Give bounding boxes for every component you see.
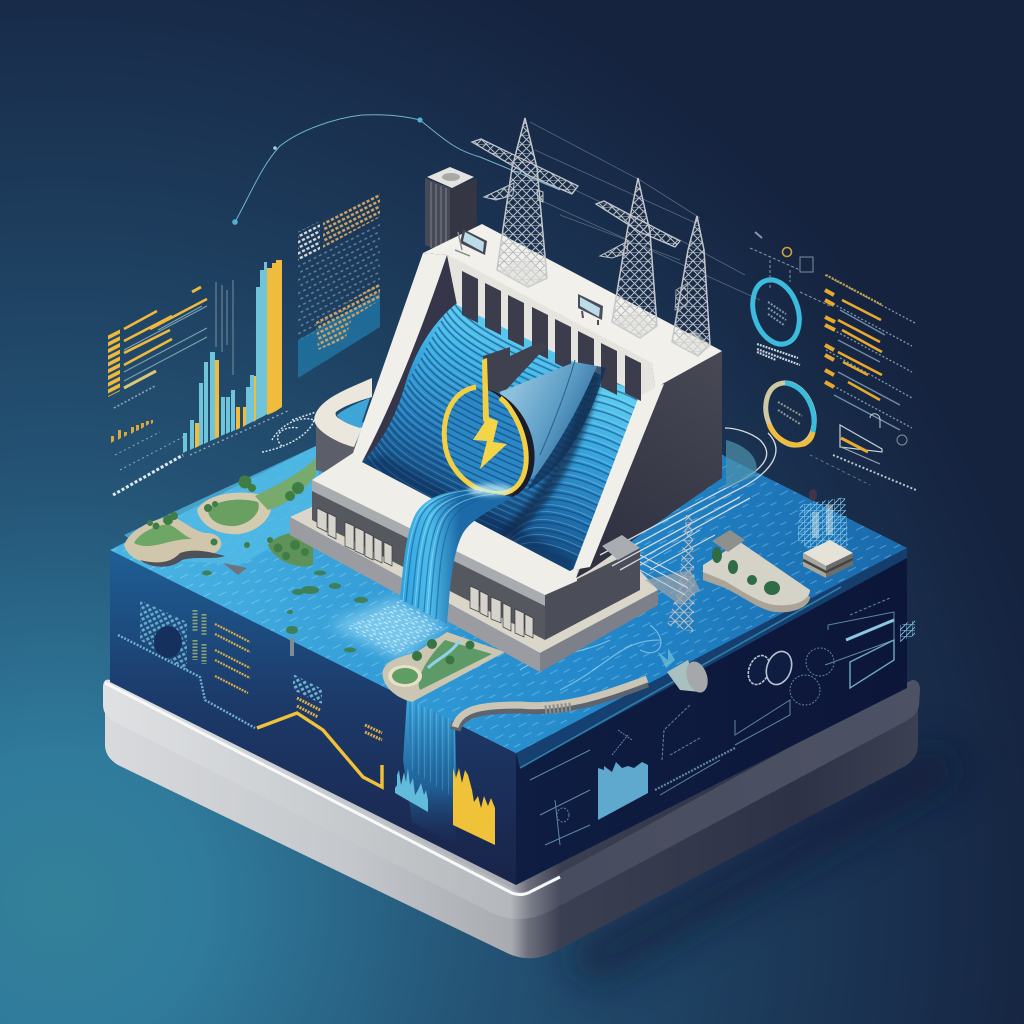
drop shadow under platform: [560, 745, 975, 990]
yellow dotted text: [297, 698, 382, 740]
yellow stripe column: [108, 329, 120, 397]
spillway water: [362, 303, 638, 571]
small islets in water: [202, 570, 368, 652]
waterfall stream: [400, 484, 513, 624]
yellow bars: [453, 768, 495, 845]
peninsula with trees: [703, 530, 810, 612]
energy ring: [442, 384, 535, 497]
mini chart box: [810, 414, 916, 490]
substation: [797, 489, 853, 578]
platform: lower tray: [105, 705, 918, 958]
lightning bolt: [473, 417, 507, 469]
deck monitor right: [578, 294, 603, 325]
lightning bolt stem: [482, 358, 489, 425]
ring label marks: [768, 302, 786, 325]
tray highlight rim: [105, 683, 560, 895]
hatch side tag: [900, 620, 915, 642]
trees: [147, 476, 309, 560]
multi-colour ring gauge: [757, 376, 823, 452]
centre lawn: [208, 500, 259, 526]
pylon in water: [640, 515, 700, 632]
yellow ring stroke: [444, 387, 526, 494]
block: top water surface: [110, 348, 907, 753]
dam: left white buttress: [353, 253, 447, 462]
dam: front wall with windows: [312, 480, 640, 640]
trees and shrubs: [712, 547, 780, 595]
sketch circuit lines: [530, 598, 894, 845]
chart: dotted teal heat block: [140, 600, 187, 670]
boat: [223, 563, 247, 575]
island: upper bank: [255, 458, 316, 510]
top icons and dotted links: [750, 232, 830, 306]
dam: right white buttress: [573, 384, 664, 570]
dam: right concrete wall: [576, 351, 722, 578]
turbine cylinder: [500, 360, 606, 492]
small building: [712, 530, 745, 552]
islands: left shoreline: [124, 445, 368, 656]
right lobe water: [506, 383, 638, 571]
block: right face: [516, 548, 915, 885]
road and pipe along front edge: [455, 679, 647, 730]
platform: upper tray: [103, 680, 920, 919]
data panel: right floating gauges: [745, 232, 916, 490]
yellow line chart: [257, 713, 382, 787]
block: left face: [110, 550, 516, 885]
yellow text lines: [215, 624, 250, 693]
ring inner water: [446, 387, 524, 491]
island: near plinth: [268, 532, 313, 566]
dam: dark inner left wall: [358, 255, 460, 462]
island: centre: [197, 493, 271, 534]
window group left: [317, 508, 392, 566]
window group right: [470, 586, 533, 638]
shadow beside cylinder: [505, 366, 597, 536]
small yellow bars: [111, 420, 153, 443]
gate openings: [462, 271, 641, 401]
horizontal bar lines: [113, 280, 290, 495]
dam: lower ledge: [290, 420, 658, 672]
outer left lawn: [134, 524, 192, 546]
base shadow: [362, 455, 575, 571]
foam below waterfall: [330, 598, 448, 660]
bar chart: yellow bars: [195, 260, 282, 448]
mini blue grid: [293, 674, 322, 704]
dotted heat panel: [298, 192, 380, 378]
top glow strip: [516, 548, 907, 768]
pylon 2: [596, 178, 680, 338]
data panel: left floating charts: [108, 115, 560, 495]
island: foreground below waterfall: [383, 632, 505, 702]
caption marks: [757, 344, 800, 365]
cyan ring gauge: [745, 274, 807, 350]
marker post: [290, 638, 294, 656]
teal edge line: [520, 587, 841, 768]
lagoon light water: [124, 445, 320, 565]
pylon 3: [672, 216, 710, 356]
stepped dotted line: [118, 635, 255, 728]
gears: [744, 648, 796, 688]
deck monitor left: [455, 229, 487, 256]
blue bars: [598, 762, 648, 820]
reservoir curved wall: [314, 378, 372, 480]
left lobe contour lines: [370, 304, 586, 570]
power lines: [530, 122, 760, 300]
bar chart: light blue bars: [183, 262, 267, 453]
dark gate flag: [483, 342, 547, 396]
dark dot cluster: [154, 626, 182, 658]
water behind right wall: [726, 440, 757, 488]
dam: gate piers: [447, 255, 655, 401]
dam: top deck: [423, 224, 722, 388]
land shadow: [140, 551, 225, 567]
arc line with nodes: [232, 115, 560, 225]
island: outer left: [124, 516, 221, 564]
light blue bars: [395, 768, 428, 812]
table of line bars: [825, 275, 915, 430]
penstock pipes: [600, 428, 776, 570]
river highlights: [520, 625, 661, 690]
dam: upper deck: [312, 453, 577, 595]
pylon 1: [472, 118, 578, 287]
waterfall on the face: [403, 698, 457, 845]
ring shadow: [432, 376, 550, 512]
pipe outlet cylinder: [658, 648, 711, 695]
swirl doodle: [262, 412, 316, 452]
small dotted column cluster: [195, 610, 204, 664]
back tower building: [425, 167, 477, 258]
